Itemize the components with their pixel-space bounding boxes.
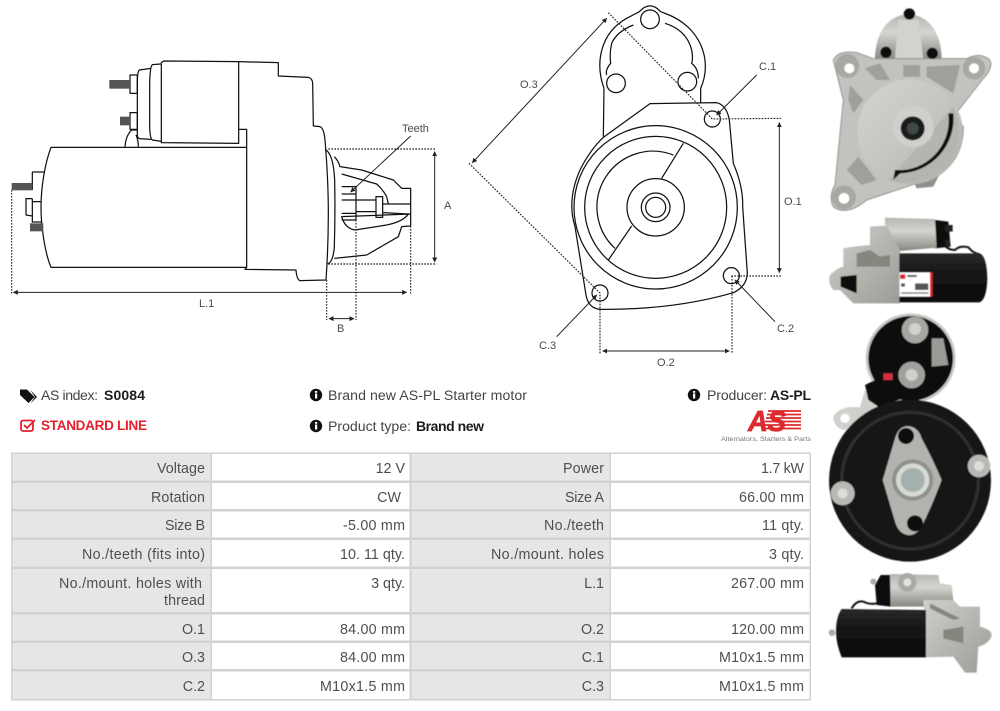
- front view technical drawing: [469, 6, 782, 353]
- column 2 values: 11 qty.: [762, 518, 804, 534]
- photo: side of starter rear view: [829, 573, 992, 673]
- column 2 labels: No./teeth: [544, 518, 604, 534]
- mounting holes: [592, 10, 739, 301]
- label: O.3: O.3: [520, 79, 538, 91]
- solenoid silhouette: [600, 6, 705, 137]
- column 2 values: 120.00 mm: [731, 622, 804, 638]
- pinion teeth: [342, 187, 408, 220]
- standard line: STANDARD LINE: [41, 418, 147, 433]
- label: O.1: O.1: [784, 196, 802, 208]
- column 1 values: M10x1.5 mm: [320, 679, 405, 695]
- producer: [707, 387, 811, 403]
- label: C.2: C.2: [777, 323, 794, 335]
- column 1 labels: No./mount. holes with: [59, 576, 202, 592]
- drive opening: [574, 126, 737, 289]
- column 2 values: M10x1.5 mm: [719, 650, 804, 666]
- column 2 values: 66.00 mm: [739, 490, 804, 506]
- column 2 labels: Power: [563, 461, 604, 477]
- column 1 labels: C.2: [183, 679, 205, 695]
- mounting flange: [572, 103, 747, 309]
- specification table: [11, 452, 811, 700]
- column 2 values: M10x1.5 mm: [719, 679, 804, 695]
- AS logo: AS: [747, 406, 787, 438]
- icon: info: [310, 389, 322, 401]
- column 1 values: 10. 11 qty.: [340, 547, 405, 563]
- column 2 values: [719, 461, 804, 695]
- AS logo: [721, 406, 811, 443]
- side view technical drawing: [12, 61, 437, 320]
- column 2 values: 1.7 kW: [761, 461, 804, 477]
- AS logo: Alternators, Starters & Parts: [721, 436, 811, 443]
- column 1 labels: O.1: [182, 622, 205, 638]
- AS index: AS index:: [41, 387, 98, 403]
- label: C.1: C.1: [759, 61, 776, 73]
- product type: [328, 418, 484, 434]
- label: L.1: L.1: [199, 298, 214, 310]
- column 1 values: 84.00 mm: [340, 650, 405, 666]
- column 2 labels: C.1: [582, 650, 604, 666]
- dimension lines: [12, 136, 437, 320]
- column 1 labels: Voltage: [157, 461, 205, 477]
- column 1 labels: No./teeth (fits into): [82, 547, 205, 563]
- solenoid: [125, 61, 239, 147]
- column 2 labels: L.1: [584, 576, 604, 592]
- producer: Producer:: [707, 387, 767, 403]
- label: Teeth: Teeth: [402, 123, 429, 135]
- AS index: [41, 387, 145, 403]
- column 1 labels: [59, 461, 205, 695]
- column 2 labels: C.3: [582, 679, 604, 695]
- column 1 values: [320, 461, 405, 695]
- label: A: A: [444, 200, 452, 212]
- column 1 values: CW: [377, 490, 401, 506]
- column 1 labels: thread: [164, 593, 205, 609]
- column 1 labels: Rotation: [151, 490, 205, 506]
- column 1 values: -5.00 mm: [343, 518, 405, 534]
- label: B: B: [337, 323, 344, 335]
- column 2 labels: O.2: [581, 622, 604, 638]
- column 2 values: 3 qty.: [769, 547, 804, 563]
- terminal bolts: [12, 75, 137, 231]
- photo: side of starter with label: [829, 218, 987, 303]
- column 1 values: 3 qty.: [371, 576, 405, 592]
- product type: Brand new: [416, 418, 484, 434]
- column 1 values: 84.00 mm: [340, 622, 405, 638]
- dimension lines: [469, 13, 782, 353]
- icon: info: [310, 420, 322, 432]
- column 2 labels: No./mount. holes: [491, 547, 604, 563]
- column 1 labels: Size B: [165, 518, 205, 534]
- photo: front of starter: [831, 8, 991, 210]
- photo: rear of starter: [829, 313, 991, 562]
- icon: info: [688, 389, 700, 401]
- column 1 labels: O.3: [182, 650, 205, 666]
- drive nose: [325, 149, 411, 264]
- product type: Product type:: [328, 418, 411, 434]
- label: O.2: O.2: [657, 357, 675, 369]
- AS index: S0084: [104, 387, 145, 403]
- product info header: [20, 387, 811, 443]
- column 2 labels: Size A: [565, 490, 604, 506]
- column 1 values: 12 V: [376, 461, 405, 477]
- column 2 labels: [491, 461, 604, 695]
- drive end housing: [239, 62, 328, 281]
- column 2 values: 267.00 mm: [731, 576, 804, 592]
- motor housing: [41, 147, 247, 267]
- product description: Brand new AS-PL Starter motor: [328, 387, 527, 403]
- label: C.3: C.3: [539, 340, 556, 352]
- producer: AS-PL: [770, 387, 811, 403]
- icon: checkbox: [21, 420, 35, 431]
- icon: tags: [20, 390, 37, 404]
